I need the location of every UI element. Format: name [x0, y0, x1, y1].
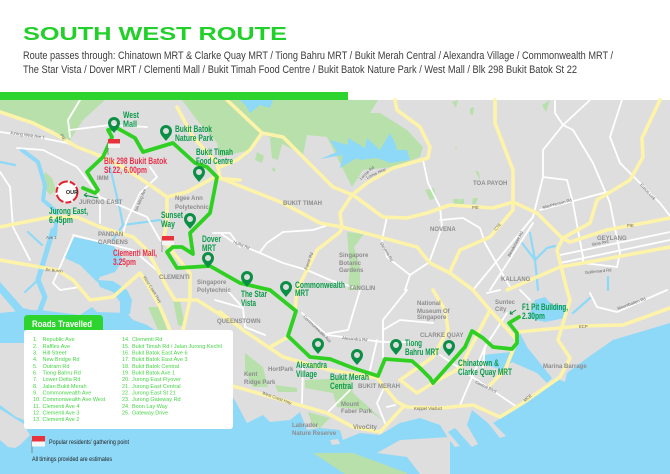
- label: Chinatown and Clarke Quay MRT: Chinatown &: [458, 358, 499, 368]
- road list column 2: 21.: [122, 384, 130, 390]
- road list column 2: Jurong East Flyover: [132, 377, 181, 383]
- label: Bukit Batok Nature Park: [175, 124, 214, 143]
- road list column 2: 15.: [122, 344, 130, 350]
- route line: [83, 128, 519, 383]
- label: Jurong East: 6.45pm: [49, 215, 73, 225]
- road names: West Coast Hwy: [262, 390, 293, 406]
- area names: NOVENA: [430, 227, 456, 233]
- label: Bukit Merah Central: Central: [330, 381, 353, 391]
- road list column 1: Hill Street: [42, 350, 67, 356]
- road list column 2: 16.: [122, 350, 130, 356]
- road names: Central Blvd: [475, 379, 498, 394]
- label: Bukit Timah Food Centre: Bukit Timah: [196, 147, 233, 157]
- label: Dover MRT: Dover: [202, 234, 221, 244]
- label: Jurong East: Jurong East,: [49, 206, 88, 216]
- label: Commonwealth MRT: MRT: [295, 288, 309, 298]
- route description: [23, 50, 614, 76]
- label: Dover MRT: MRT: [202, 243, 216, 253]
- area names: BUKIT TIMAH: [283, 201, 322, 207]
- road list column 1: 10.: [33, 397, 41, 403]
- road list column 1: 2.: [33, 344, 38, 350]
- area names: Polytechnic: [197, 288, 231, 294]
- area names: City: [495, 307, 507, 313]
- road list column 1: 4.: [33, 357, 38, 363]
- logo: Our Singapore: [56, 180, 78, 204]
- area names: Botanic: [339, 261, 362, 267]
- road list column 2: Jurong East St 21: [132, 390, 176, 396]
- area names: JURONG EAST: [79, 200, 123, 206]
- road names: Jln Buroh: [45, 267, 64, 274]
- road names: Lornie Rd: [358, 164, 376, 181]
- panel: roads travelled: [24, 315, 233, 429]
- label: The Star Vista: The Star: [241, 289, 267, 299]
- road names: Sims Ave: [591, 238, 610, 247]
- area names: Polytechnic: [175, 205, 209, 211]
- label: West Mall: [123, 110, 139, 129]
- label: Alexandra Village: Alexandra: [296, 360, 328, 370]
- label: F1 Pit Building: 2.30pm: [522, 311, 545, 321]
- road list column 2: Bukit Batok East Ave 6: [132, 350, 188, 356]
- road names: Lornie Hwy: [365, 166, 387, 180]
- road list column 1: New Bridge Rd: [42, 357, 80, 363]
- pin: Tiong Bahru MRT: [390, 339, 402, 355]
- area names: Mount: [341, 402, 359, 408]
- label: Commonwealth MRT: Commonwealth: [295, 280, 345, 290]
- road names: Ave 1: [46, 235, 57, 240]
- label: Blk 298 Bukit Batok St 22: Blk 298 Bukit Batok: [104, 156, 168, 166]
- road list column 2: 23.: [122, 397, 130, 403]
- area names: Nature Reserve: [292, 431, 337, 437]
- area names: TOA PAYOH: [473, 181, 507, 187]
- expressways: [0, 100, 670, 432]
- panel tab heading: Roads Travelled: [32, 319, 92, 330]
- arrow: to Jurong East: [84, 193, 98, 198]
- pin: West Mall: [108, 117, 120, 133]
- pin: Alexandra Village: [312, 338, 324, 354]
- area names: IMM: [97, 176, 109, 182]
- road list column 1: 12.: [33, 410, 41, 416]
- reservoirs and rivers: [0, 100, 570, 383]
- road list column 1: [33, 337, 106, 423]
- road list column 1: 6.: [33, 370, 38, 376]
- area names: Ridge Park: [244, 380, 276, 386]
- area names: Ngee Ann: [175, 196, 203, 202]
- area names: Marina Barrage: [543, 364, 587, 370]
- road names: Guillemard Rd: [585, 267, 612, 275]
- label: Sunset Way: Sunset: [161, 210, 183, 220]
- white roads: [0, 100, 670, 423]
- road list column 2: Jurong Gateway Rd: [132, 397, 181, 403]
- road list column 2: 18.: [122, 364, 130, 370]
- road list column 1: Clementi Ave 4: [42, 404, 79, 410]
- road list column 1: Outram Rd: [42, 364, 69, 370]
- area names: [79, 176, 627, 437]
- area names: TANGLIN: [349, 286, 375, 292]
- label: Bukit Timah Food Centre: [196, 147, 233, 166]
- area names: Singapore: [339, 253, 369, 259]
- road list column 1: 9.: [33, 390, 38, 396]
- road list column 2: Jurong East Central: [132, 384, 181, 390]
- road list column 2: 20.: [122, 377, 130, 383]
- timing note: All timings provided are estimates: [32, 456, 112, 463]
- road names: Keppel Viaduct: [414, 406, 443, 411]
- area names: KALLANG: [501, 277, 531, 283]
- legend flag: [32, 436, 45, 453]
- panel tab heading: [24, 315, 103, 330]
- pin: Chinatown and Clarke Quay MRT: [443, 340, 455, 356]
- label: F1 Pit Building: F1 Pit Building,: [522, 302, 568, 312]
- label: Blk 298 Bukit Batok St 22: [104, 156, 168, 175]
- road list column 1: Jalan Bukit Merah: [42, 384, 87, 390]
- road list column 1: 13.: [33, 417, 41, 423]
- area names: VivoCity: [353, 425, 378, 431]
- route description: The Star Vista / Dover MRT / Clementi Mall / Bukit Timah Food Centre / Bukit Batok Nature Park / West Mall / Blk 298 Bukit Batok St 22: [23, 64, 577, 76]
- road list column 2: Bukit Batok Central: [132, 364, 179, 370]
- area names: National: [417, 301, 441, 307]
- area names: PANDAN: [98, 232, 123, 238]
- road list column 1: Republic Ave: [42, 337, 75, 343]
- panel body: [24, 330, 233, 429]
- area names: Singapore: [417, 315, 447, 321]
- road list column 2: [122, 337, 222, 416]
- road names: Alexandra Rd: [342, 335, 368, 342]
- label: Clementi Mall: 3.25pm: [113, 257, 136, 267]
- area names: GARDENS: [98, 240, 128, 246]
- road names: [10, 130, 657, 411]
- label: Bukit Batok Nature Park: Bukit Batok: [175, 124, 213, 134]
- islands: [0, 343, 450, 474]
- road names: MCE: [522, 393, 533, 403]
- road names: PIE: [472, 205, 479, 210]
- area names: CLARKE QUAY: [420, 333, 463, 339]
- top accent bar: [0, 92, 348, 100]
- label: Commonwealth MRT: [295, 280, 345, 298]
- road list column 2: 25.: [122, 410, 130, 416]
- pin: Bukit Merah Central: [351, 349, 363, 365]
- road list column 2: 24.: [122, 404, 130, 410]
- road names: Jurong West Ave 1: [10, 130, 46, 140]
- label: West Mall: Mall: [123, 119, 137, 129]
- road list column 1: 1.: [33, 337, 38, 343]
- road list column 1: Clementi Ave 3: [42, 410, 79, 416]
- label: Bukit Merah Central: [330, 372, 369, 391]
- area names: Gardens: [339, 268, 364, 274]
- road list column 2: Bukit Batok Ave 1: [132, 370, 175, 376]
- pin: The Star Vista: [241, 271, 253, 287]
- road names: Hullet Rd: [233, 239, 251, 251]
- road list column 1: 8.: [33, 384, 38, 390]
- arrow: to F1 Pit Building: [510, 310, 516, 314]
- road list column 2: Bukit Batok East Ave 3: [132, 357, 188, 363]
- area names: HortPark: [268, 367, 294, 373]
- label: Jurong East: [49, 206, 88, 225]
- area names: QUEENSTOWN: [217, 319, 261, 325]
- label: Chinatown and Clarke Quay MRT: Clarke Quay MRT: [458, 367, 512, 377]
- road list column 2: 17.: [122, 357, 130, 363]
- road list column 1: Commonwealth Ave: [42, 390, 91, 396]
- label: West Mall: West: [123, 110, 139, 120]
- road names: ECP: [579, 324, 588, 329]
- road list column 1: 11.: [33, 404, 41, 410]
- label: Bukit Timah Food Centre: Food Centre: [196, 156, 233, 166]
- area names: Labrador: [292, 423, 319, 429]
- road names: CTE: [493, 222, 502, 232]
- road names: MacPherson Rd: [542, 197, 573, 210]
- label: Bukit Merah Central: Bukit Merah: [330, 372, 369, 382]
- road names: Commonwealth Ave: [302, 314, 333, 344]
- label: The Star Vista: [241, 289, 267, 308]
- label: F1 Pit Building: [522, 302, 568, 321]
- pin: Commonwealth MRT: [280, 281, 292, 297]
- map: [0, 100, 670, 474]
- road list column 1: Lower Delta Rd: [42, 377, 80, 383]
- area names: GEYLANG: [597, 236, 627, 242]
- road list column 1: Raffles Ave: [42, 344, 70, 350]
- road list column 1: Clementi Ave 2: [42, 417, 79, 423]
- road names: Stevens Rd: [379, 241, 395, 263]
- parks: [0, 100, 550, 474]
- label: Clementi Mall: Clementi Mall,: [113, 248, 157, 258]
- area names: Faber Park: [341, 409, 373, 415]
- road names: Farrer Rd: [303, 251, 314, 270]
- label: Blk 298 Bukit Batok St 22: St 22, 6.00pm: [104, 165, 147, 175]
- title: SOUTH WEST ROUTE: [23, 23, 287, 44]
- area names: CLEMENTI: [159, 275, 190, 281]
- road names: West Coast Hwy: [142, 275, 163, 304]
- pin: Bukit Timah Food Centre: [193, 166, 205, 182]
- road names: PIE: [627, 223, 634, 228]
- road names: Bendemeer Rd: [506, 230, 524, 257]
- road list column 2: 19.: [122, 370, 130, 376]
- road list column 2: Clementi Rd: [132, 337, 162, 343]
- road list column 1: Tiong Bahru Rd: [42, 370, 81, 376]
- label: Alexandra Village: Village: [296, 369, 317, 379]
- label: Chinatown and Clarke Quay MRT: [458, 358, 512, 377]
- road list column 1: 7.: [33, 377, 38, 383]
- sea: [0, 307, 670, 474]
- road names: Mountbatten Rd: [617, 296, 647, 311]
- label: Bukit Batok Nature Park: Nature Park: [175, 133, 214, 143]
- flag: Clementi Mall: [162, 236, 174, 252]
- label: Sunset Way: [161, 210, 183, 229]
- legend text: Popular residents' gathering point: [49, 439, 129, 446]
- road list column 1: Commonwealth Ave West: [42, 397, 106, 403]
- label: Tiong Bahru MRT: Tiong: [405, 338, 422, 348]
- road list column 1: 3.: [33, 350, 38, 356]
- logo: Our Singapore: OUR: [66, 190, 78, 196]
- road list column 2: 14.: [122, 337, 130, 343]
- label: Clementi Mall: [113, 248, 157, 267]
- label: Tiong Bahru MRT: [405, 338, 439, 357]
- road names: Sin Ming Ave: [133, 187, 147, 212]
- label: Alexandra Village: [296, 360, 328, 379]
- road list column 1: 5.: [33, 364, 38, 370]
- flag: Blk 298: [108, 139, 120, 155]
- road list column 2: 22.: [122, 390, 130, 396]
- road list column 2: Boon Lay Way: [132, 404, 168, 410]
- area names: Kent: [244, 372, 257, 378]
- road list column 2: Bukit Timah Rd / Jalan Jurong Kechil: [132, 344, 222, 350]
- road names: Eunos Link: [639, 182, 657, 202]
- area names: Museum Of: [417, 309, 451, 315]
- label: Tiong Bahru MRT: Bahru MRT: [405, 347, 439, 357]
- road names: PIE: [59, 133, 67, 142]
- area names: Singapore: [197, 280, 227, 286]
- label: Dover MRT: [202, 234, 221, 253]
- pin: Bukit Batok Nature Park: [160, 125, 172, 141]
- pin: Dover MRT: [202, 252, 214, 268]
- pin: Sunset Way: [184, 213, 196, 229]
- area names: Suntec: [495, 300, 516, 306]
- label: Sunset Way: Way: [161, 219, 175, 229]
- road list column 2: Gateway Drive: [132, 410, 168, 416]
- label: The Star Vista: Vista: [241, 298, 257, 308]
- area names: BUKIT MERAH: [358, 384, 400, 390]
